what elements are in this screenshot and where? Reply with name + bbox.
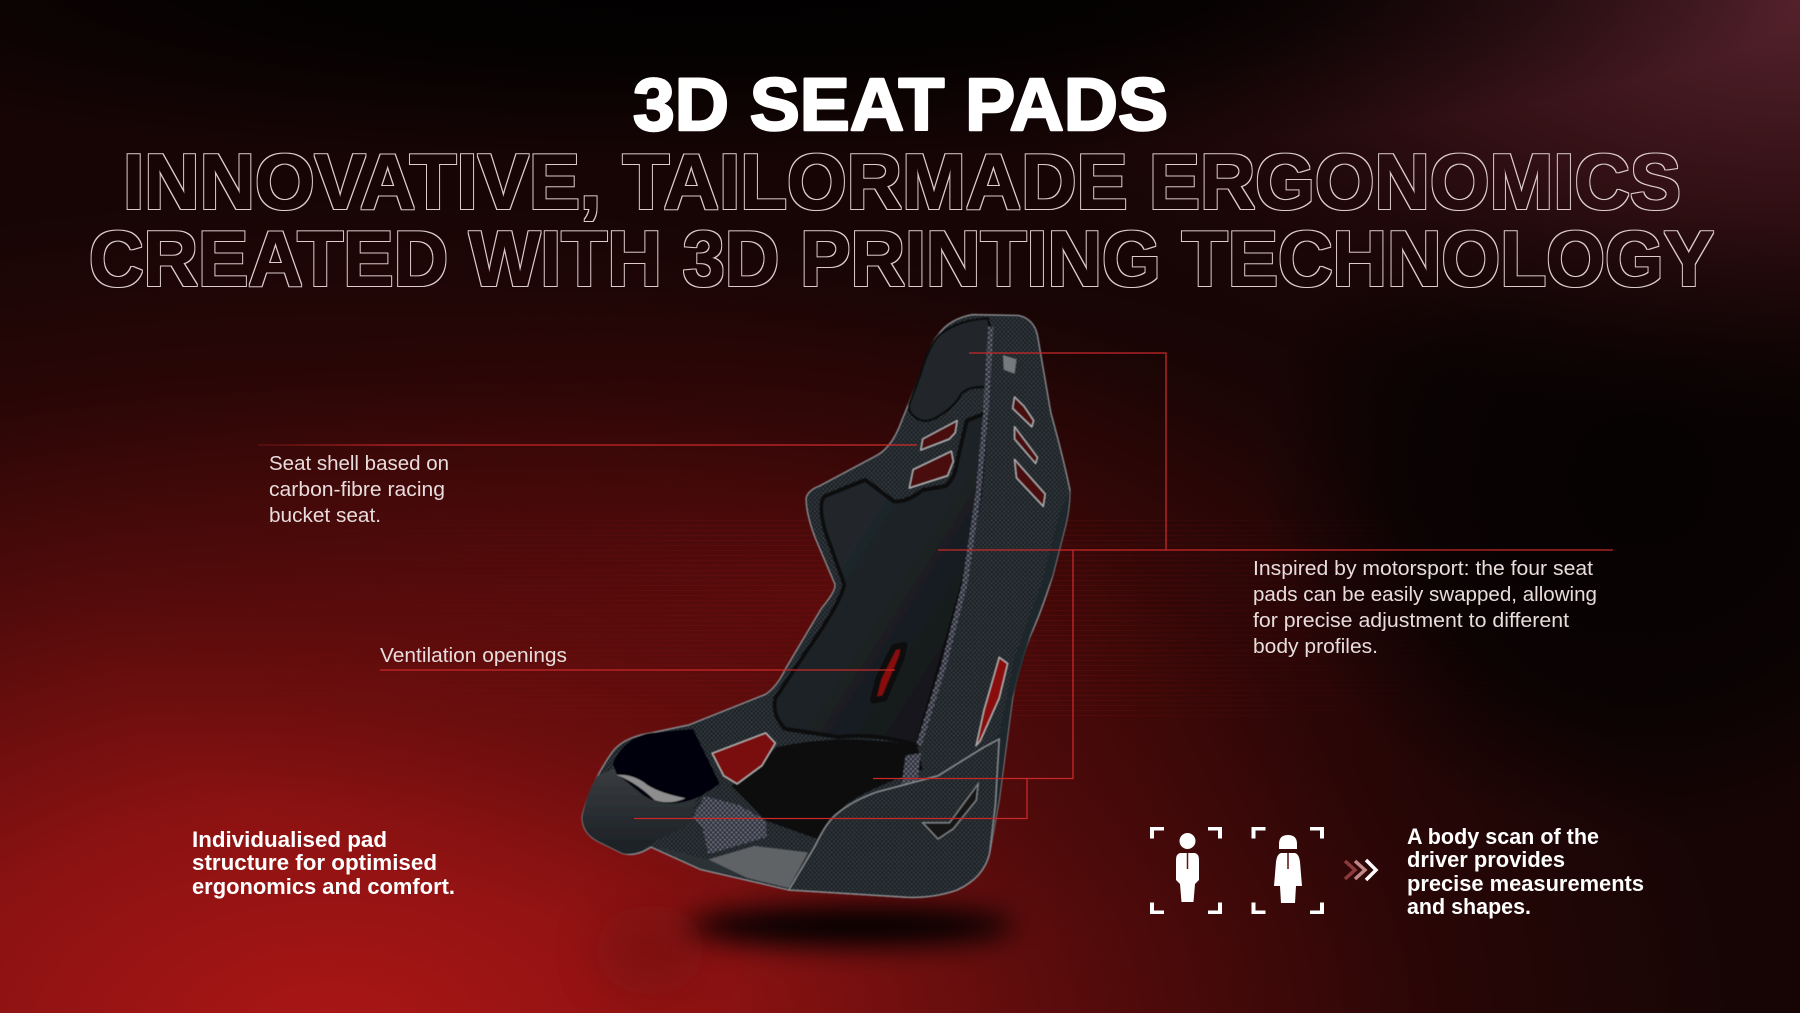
right bolster xyxy=(789,739,999,897)
callout: ventilation openings: Ventilation openings xyxy=(380,644,567,667)
seat shell xyxy=(582,314,1070,897)
headrest shine xyxy=(1003,355,1016,374)
right outer wing of shell xyxy=(957,490,1070,890)
subtitle outlined text: CREATED WITH 3D PRINTING TECHNOLOGY xyxy=(89,214,1714,302)
thigh highlight xyxy=(617,775,685,802)
callout: seat pads: pads can be easily swapped, allowing xyxy=(1253,583,1597,606)
icon: male body scan xyxy=(1150,827,1222,914)
bolster cut-out xyxy=(923,784,978,839)
thigh mesh patch xyxy=(693,796,767,854)
callout: seat shell: Seat shell based on xyxy=(269,452,449,475)
red leader lines xyxy=(258,353,1613,818)
seat base xyxy=(731,739,923,839)
callout: seat shell: bucket seat. xyxy=(269,504,381,527)
headrest pad xyxy=(909,319,991,421)
front carbon floor xyxy=(708,846,808,888)
callout: body scan: driver provides xyxy=(1407,847,1565,872)
callout: body scan xyxy=(1407,824,1644,919)
callout: body scan: precise measurements xyxy=(1407,871,1644,896)
callout: seat shell xyxy=(269,452,449,527)
icon: female body scan xyxy=(1252,827,1324,914)
callout: body scan: A body scan of the xyxy=(1407,824,1599,849)
racing seat illustration xyxy=(582,314,1070,897)
callout: seat pads: Inspired by motorsport: the four seat xyxy=(1253,557,1593,580)
subtitle outlined text xyxy=(89,138,1714,302)
callout: seat pads xyxy=(1253,557,1597,658)
seat floor shadow xyxy=(595,905,1015,995)
callout: seat shell: carbon-fibre racing xyxy=(269,478,445,501)
mesh patch centre xyxy=(902,753,921,786)
icon: chevron arrows xyxy=(1345,860,1376,880)
upper backrest slots xyxy=(909,397,1045,506)
backrest pad xyxy=(775,412,987,745)
stitched mesh seam xyxy=(919,327,991,745)
callout: individualised pad structure: Individualised pad xyxy=(192,827,387,852)
callout: individualised pad structure: structure for optimised xyxy=(192,850,437,875)
subtitle outlined text: INNOVATIVE, TAILORMADE ERGONOMICS xyxy=(123,138,1681,226)
callout: individualised pad structure: ergonomics and comfort. xyxy=(192,874,455,899)
callout: individualised pad structure xyxy=(192,827,455,899)
lower ventilation slots xyxy=(712,645,1008,784)
thigh pad upper xyxy=(613,729,720,804)
callout: body scan: and shapes. xyxy=(1407,894,1531,919)
thigh pad lower xyxy=(582,768,697,854)
callout: seat pads: for precise adjustment to different xyxy=(1253,609,1569,632)
callout: seat pads: body profiles. xyxy=(1253,635,1378,658)
title: 3D SEAT PADS xyxy=(633,63,1168,146)
